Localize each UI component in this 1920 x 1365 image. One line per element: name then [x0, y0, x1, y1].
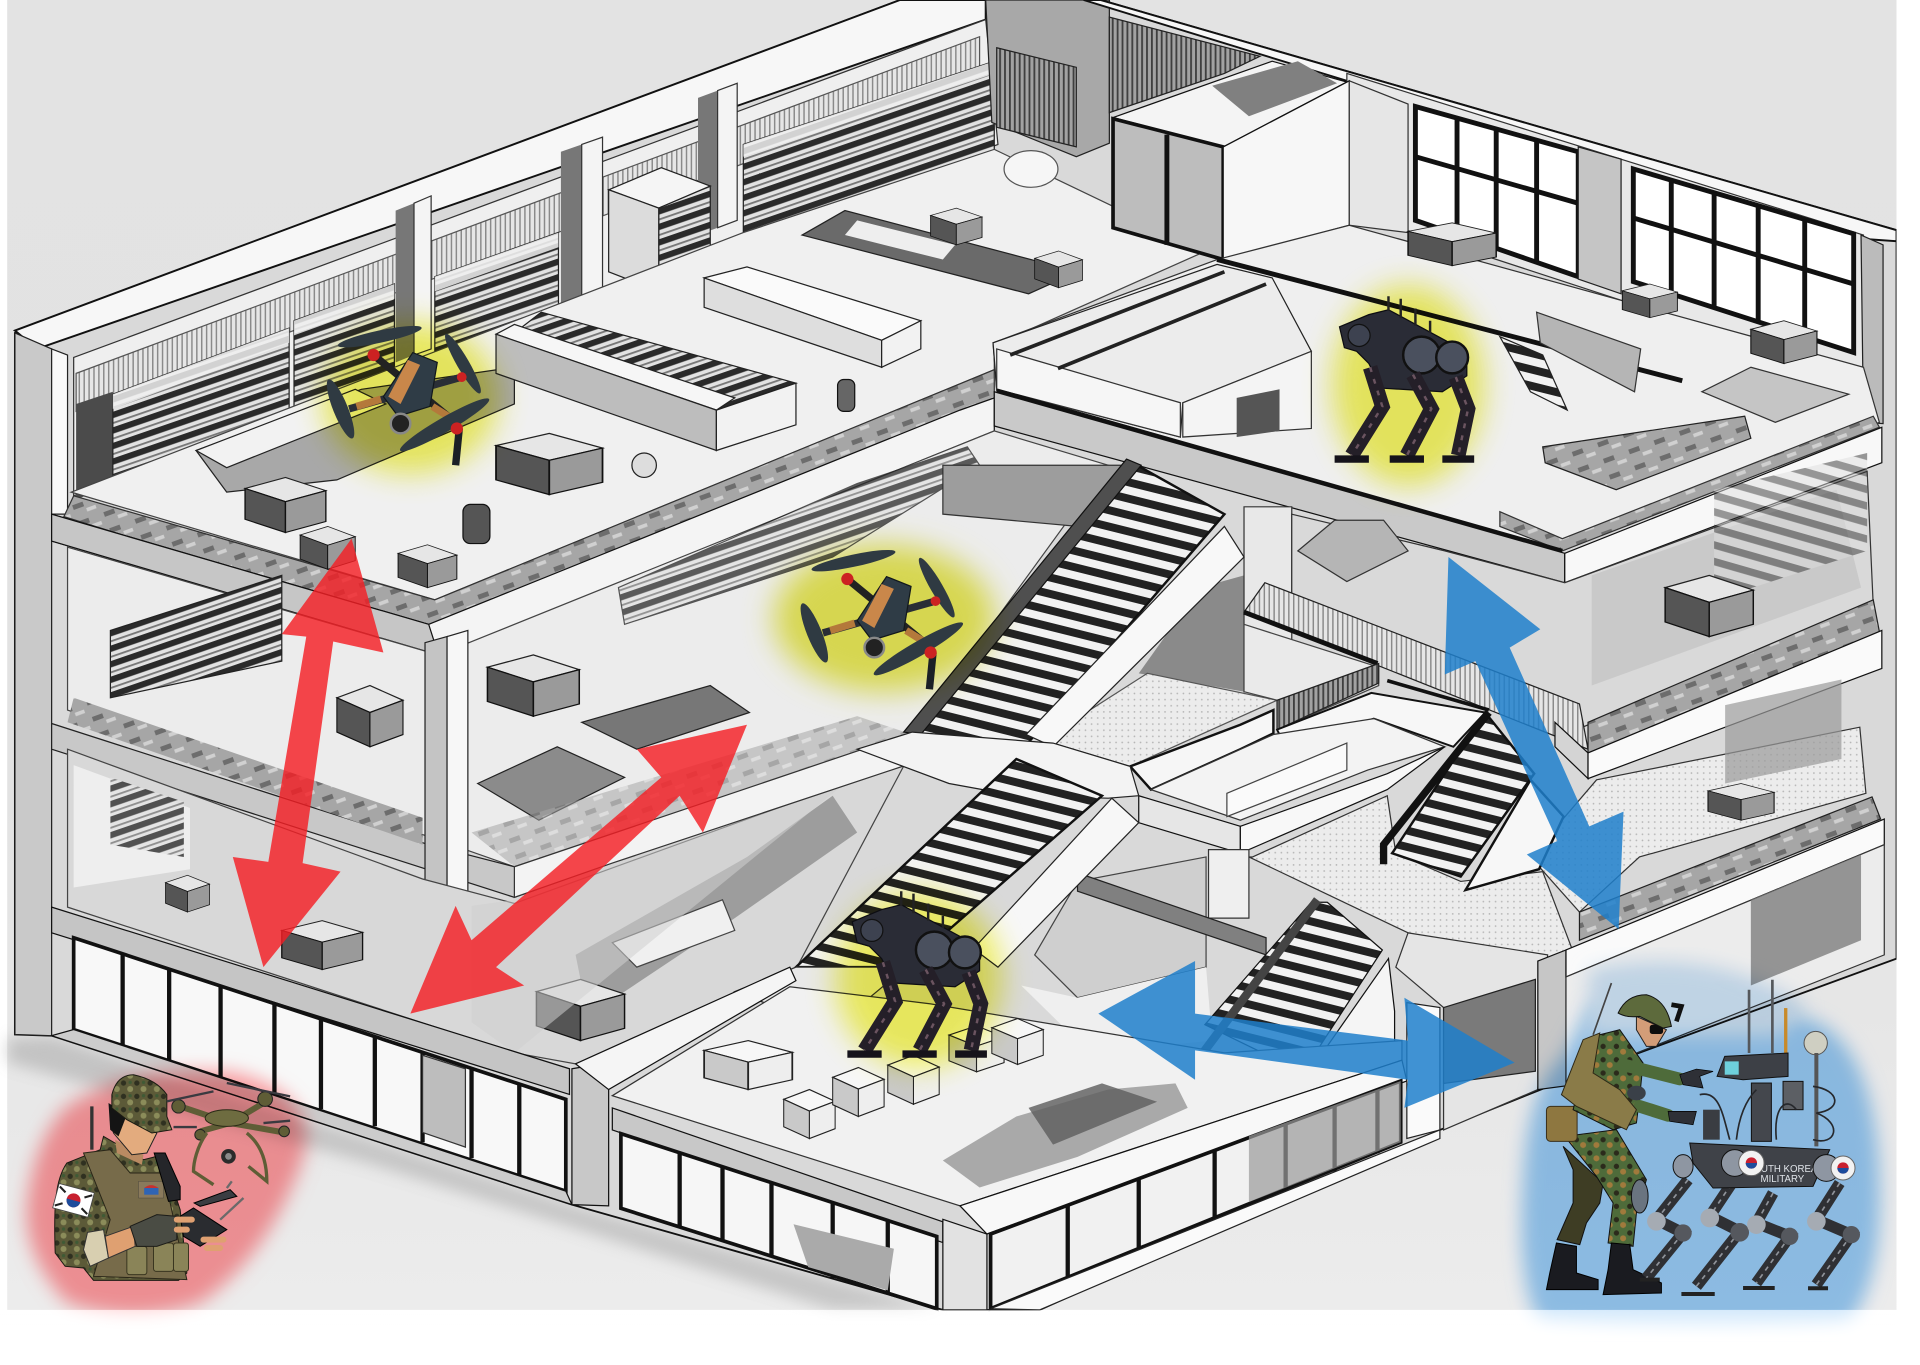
upper landing floor — [1053, 673, 1277, 766]
panel: back corner — [986, 0, 1897, 241]
forearm — [105, 1226, 135, 1258]
pouches — [127, 1243, 188, 1275]
drone upper left — [322, 322, 493, 465]
panel: right floors — [1021, 453, 1884, 1130]
back wall left — [74, 20, 998, 496]
lower small stairs — [1205, 902, 1382, 1072]
small drone — [167, 1083, 290, 1185]
antenna — [87, 1106, 97, 1150]
windows — [74, 938, 566, 1191]
rear leg — [1557, 1146, 1603, 1245]
glove — [130, 1215, 177, 1246]
red operator glow — [27, 1071, 306, 1315]
blue operator glow — [1522, 962, 1880, 1332]
bay and right ground room — [1396, 933, 1548, 1130]
front leg — [1565, 1130, 1646, 1246]
beam — [52, 907, 569, 1094]
upper flight — [912, 463, 1224, 757]
lower windows — [621, 1134, 937, 1309]
columns — [15, 83, 737, 1036]
partition rooms — [993, 260, 1682, 437]
soldier with drone controller — [53, 1075, 290, 1280]
floor — [71, 149, 1206, 600]
upper small stairs — [1392, 712, 1534, 877]
feet — [1640, 1280, 1828, 1294]
radio — [154, 1153, 180, 1201]
landing — [857, 732, 1139, 798]
panel: ground floor left — [68, 735, 906, 1064]
sleeve cuff — [84, 1230, 109, 1266]
flag joints — [1739, 1150, 1855, 1180]
floor — [993, 225, 1879, 551]
roof edge — [15, 0, 986, 349]
arrow: red diagonal double arrow — [410, 725, 747, 1014]
drones — [322, 322, 967, 689]
soldier body — [55, 1136, 187, 1280]
column lower — [1209, 850, 1249, 918]
main staircase — [735, 459, 1244, 1028]
right pillar — [1861, 235, 1883, 424]
machinery — [1408, 223, 1849, 490]
panel: upper right floor — [993, 61, 1883, 583]
under-floor bays — [1035, 857, 1206, 998]
panel: lower right facade — [960, 1003, 1440, 1310]
lower flight — [796, 759, 1102, 967]
head — [109, 1103, 157, 1165]
furniture — [337, 655, 749, 820]
body label: SOUTH KOREAN — [1747, 1164, 1824, 1175]
parapet — [1500, 416, 1879, 551]
white block — [1113, 61, 1408, 260]
floor band — [612, 1108, 943, 1243]
chest patch — [139, 1181, 163, 1198]
gloves — [1668, 1069, 1713, 1125]
yellow highlights — [322, 285, 1484, 1068]
head — [1618, 995, 1681, 1046]
chevron band — [1277, 693, 1485, 747]
furniture — [196, 151, 1082, 588]
panel: second floor left — [52, 431, 1126, 897]
drone centre — [796, 546, 967, 689]
joints — [1647, 1150, 1860, 1245]
panel: top floor left — [15, 0, 1206, 1036]
floor edge right — [994, 392, 1565, 583]
controller — [177, 1181, 243, 1248]
pouch — [1546, 1106, 1577, 1141]
wall shelves — [76, 61, 994, 499]
lower parapet — [1139, 796, 1240, 853]
arms — [1623, 1065, 1680, 1115]
body label second line: MILITARY — [1761, 1174, 1805, 1185]
window wall — [1347, 73, 1863, 380]
crates — [704, 1019, 1188, 1187]
robot dog upper right — [1335, 296, 1474, 459]
boots — [1546, 1243, 1661, 1295]
soldier operating robot dog — [1546, 980, 1860, 1295]
antenna on back — [1593, 983, 1611, 1035]
arrow: red vertical double arrow — [233, 539, 383, 967]
centre floor — [1249, 796, 1573, 967]
column — [425, 630, 468, 1031]
wall frieze — [76, 37, 980, 411]
cap — [112, 1075, 172, 1133]
right first floor — [1530, 727, 1866, 912]
knee pad — [1631, 1180, 1648, 1213]
windows — [1415, 107, 1854, 353]
arrow: blue horizontal double arrow — [1098, 961, 1515, 1108]
panel: lower front left — [52, 907, 609, 1206]
column — [1244, 507, 1292, 692]
cabinet — [609, 168, 710, 291]
ground shadow — [8, 1036, 943, 1310]
tactical vest — [84, 1150, 187, 1280]
panel: lower central floor — [576, 967, 1402, 1310]
mast and sensors — [1700, 980, 1835, 1146]
body — [1690, 1143, 1830, 1188]
robot dogs — [847, 296, 1474, 1054]
plate carrier — [1561, 1033, 1636, 1130]
hatched recess under stairs — [1139, 575, 1244, 692]
beam front — [1555, 722, 1588, 779]
elbow pad — [1627, 1086, 1646, 1100]
right second floor — [1292, 471, 1873, 728]
floor edge — [52, 398, 994, 655]
arrow: blue diagonal double arrow — [1445, 557, 1624, 929]
robot dog lower centre — [847, 891, 987, 1054]
legs — [1646, 1176, 1851, 1286]
arm flag — [53, 1183, 94, 1217]
robot quadruped — [1640, 980, 1860, 1294]
torso — [1573, 1030, 1643, 1130]
